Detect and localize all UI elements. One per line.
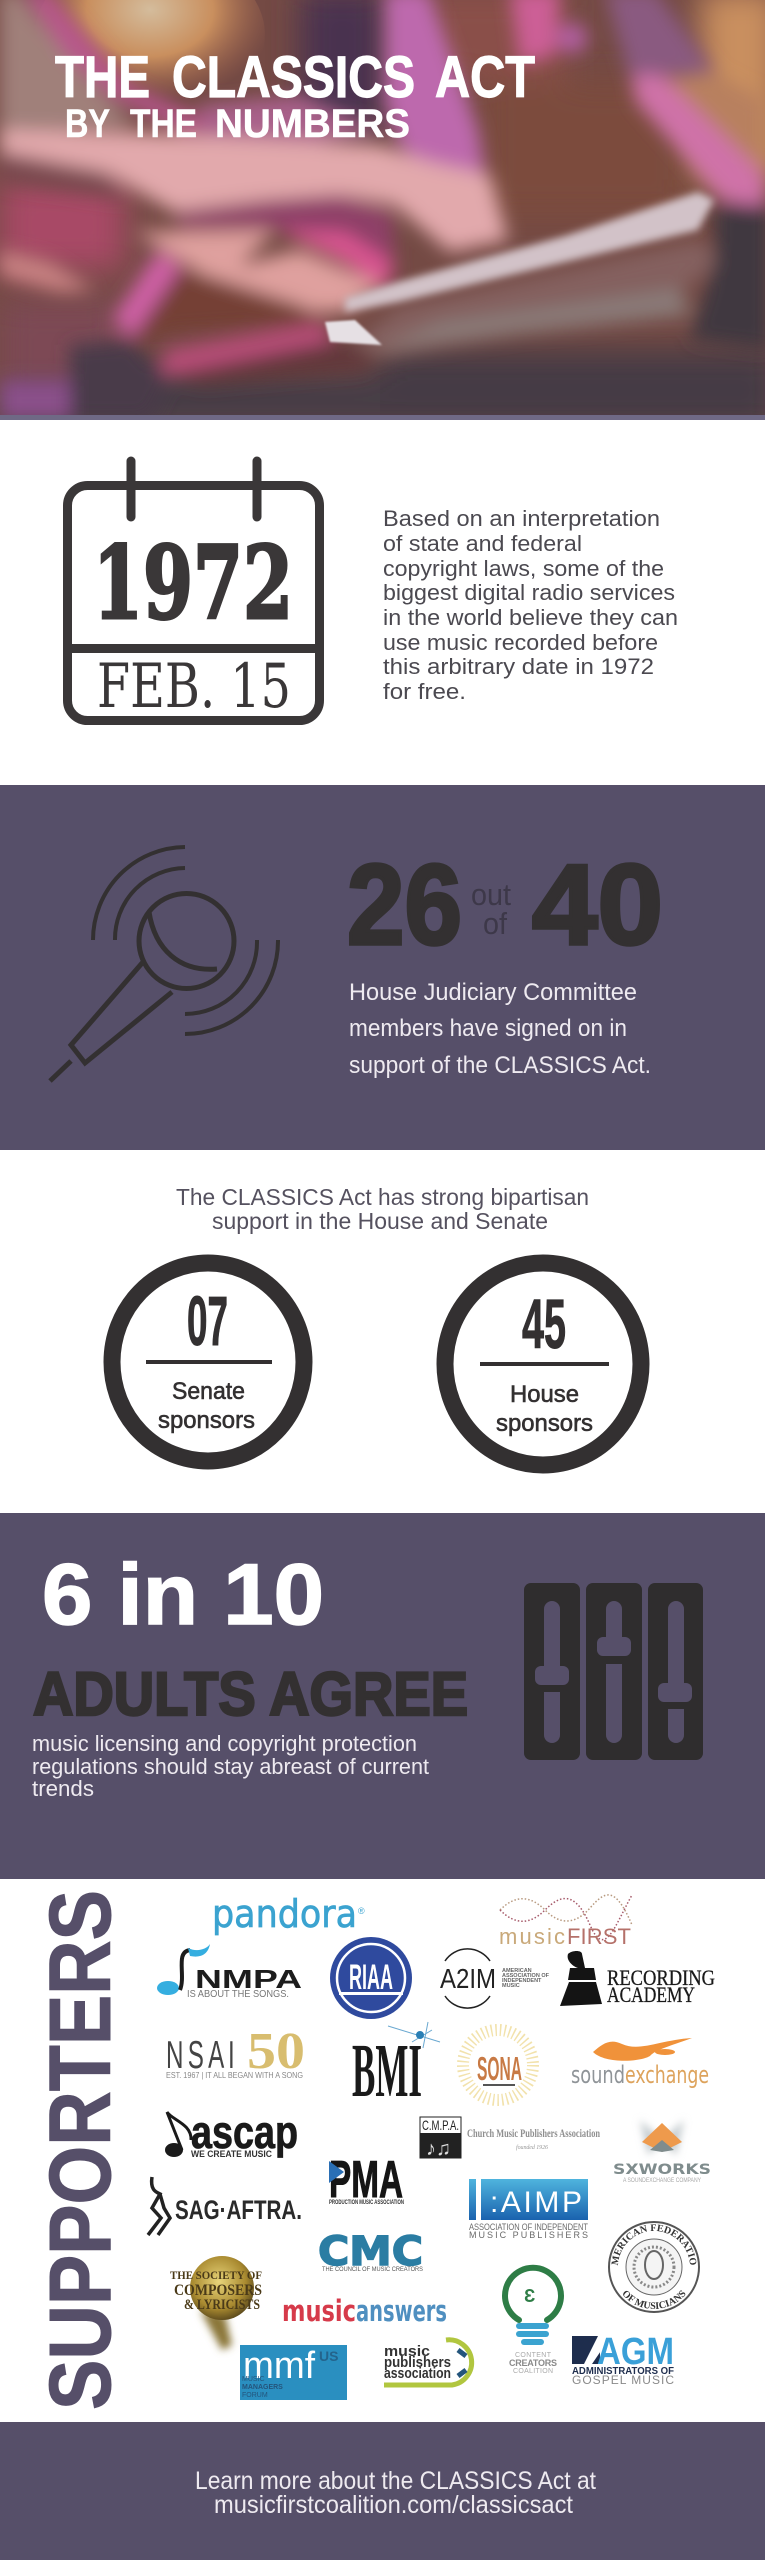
stat circle: senate sponsors: 07 [187,1282,228,1360]
text: committee members: members have signed on in [349,1015,627,1042]
logo: A2IM: A2IM [440,1963,496,1994]
logo: SXWORKS: A SOUNDEXCHANGE COMPANY [623,2178,701,2184]
logo: CMPA: founded 1926 [516,2144,548,2151]
logo: AIMP: MUSIC PUBLISHERS [469,2230,588,2240]
stat circle: house sponsors: 45 [522,1285,566,1363]
text: copyright explanation: of state and federal [383,531,582,556]
logo: Society of Composers and Lyricists [170,2256,262,2350]
logo: Music Managers Forum [240,2345,347,2400]
logo: Society of Composers and Lyricists: & LYRICISTS [184,2297,260,2313]
hero banner [0,0,765,430]
logo: Society of Composers and Lyricists: THE SOCIETY OF [170,2268,262,2282]
title [55,45,535,110]
logo: Music Managers Forum: FORUM [242,2392,268,2399]
logo: PMA [329,2151,404,2209]
text: copyright explanation: in the world believe they can [383,605,678,630]
text: learn more [195,2467,596,2519]
logo: pandora: ® [358,1906,365,1916]
logo: SONA [463,2030,533,2100]
icon: microphone [50,847,278,1081]
panel: bipartisan sponsors [0,1150,765,1513]
logo: A2IM: INDEPENDENT [502,1978,542,1984]
icon: mixer sliders [524,1583,703,1760]
text: learn more: Learn more about the CLASSICS Act at [195,2467,596,2495]
text: copyright explanation [383,506,678,704]
logo: Music Publishers Association: association [384,2365,451,2382]
logo: musicFIRST [499,1895,632,1949]
logo: CMPA: ♪♫ [426,2138,451,2160]
logo: Recording Academy: ACADEMY [607,1982,695,2007]
logo: musicFIRST: FIRST [567,1924,631,1949]
logo: AGM: ADMINISTRATORS OF [572,2366,674,2377]
text: copyright explanation: for free. [383,679,466,704]
logo: Society of Composers and Lyricists: COMPOSERS [174,2282,262,2299]
text: bipartisan heading [176,1184,589,1234]
logo: music answers: answers [356,2294,447,2328]
logo: NSAI 50: NSAI [166,2033,235,2076]
subtitle [65,102,410,146]
logo: AIMP: ASSOCIATION OF INDEPENDENT [469,2222,588,2232]
logo: Music Managers Forum: MANAGERS [242,2384,283,2391]
stat circle: house sponsors [445,1263,641,1465]
text: learn more: musicfirstcoalition.com/classicsact [214,2491,573,2519]
subtitle: NUMBERS [215,102,410,146]
logo: BMI [352,2022,440,2113]
warm glow [50,0,264,94]
stat circle: house sponsors: sponsors [496,1410,593,1437]
logo: NSAI 50: 50 [247,2023,305,2080]
text: copyright explanation: this arbitrary date in 1972 [383,654,654,679]
logo: CMC: THE COUNCIL OF MUSIC CREATORS [322,2267,423,2273]
logo: A2IM: ASSOCIATION OF [502,1973,550,1979]
logo: music answers: music [282,2294,356,2328]
logo: A2IM [440,1949,550,2008]
text: regulations: trends [32,1776,94,1801]
title: CLASSICS [172,45,415,110]
logo: A2IM: MUSIC [502,1983,520,1989]
stat: 26: 26 [347,842,462,969]
title: THE [55,45,150,110]
logo: A2IM: AMERICAN [502,1968,532,1974]
hero bottom strip [0,415,765,420]
stat: 6 in 10: 6 in 10 [42,1547,324,1643]
text: bipartisan heading: support in the House and Senate [212,1208,548,1234]
text: of: of [483,906,507,941]
logo: RIAA [330,1937,412,2019]
logo: PMA: PRODUCTION MUSIC ASSOCIATION [329,2200,404,2206]
logo: Content Creators Coalition: COALITION [513,2368,553,2375]
panel: footer [0,2422,765,2560]
subtitle: BY [65,102,110,146]
logo: Music Managers Forum: US [319,2348,338,2364]
logo: musicFIRST: music [499,1924,565,1949]
logo: SAG-AFTRA [148,2177,302,2235]
logo: CMPA [420,2117,600,2160]
logo: CMPA: C.M.P.A. [422,2117,459,2133]
icon: calendar: 1972 [93,524,293,642]
logo: Music Managers Forum: MUSIC [242,2376,265,2383]
logo: SXWORKS: SXWORKS [613,2162,711,2178]
logo: AGM [572,2331,674,2387]
stat circle: senate sponsors [112,1263,304,1461]
logo: NSAI 50: EST. 1967 | IT ALL BEGAN WITH A SONG [166,2071,303,2080]
subtitle: THE [130,102,197,146]
logo: SoundExchange [571,2038,709,2089]
heading: supporters (vertical): SUPPORTERS [32,1890,129,2410]
logo: SAG-AFTRA: SAG·AFTRA. [175,2195,302,2225]
logo: Content Creators Coalition [505,2268,561,2375]
logo: AGM: AGM [597,2331,674,2373]
logo: NMPA: IS ABOUT THE SONGS. [187,1989,289,2000]
logo: Content Creators Coalition: CONTENT [515,2352,552,2359]
logo: ASCAP: WE CREATE MUSIC [191,2149,272,2159]
logo: American Federation of Musicians: OF MUSICIANS [623,2290,686,2309]
text: regulations [32,1731,429,1801]
logo: pandora: pandora [212,1892,357,1936]
stat circle: house sponsors: House [510,1381,579,1408]
icon: calendar: FEB. 15 [97,651,291,722]
text: copyright explanation: use music recorded before [383,630,658,655]
logo: Music Publishers Association: publishers [384,2354,451,2371]
text: copyright explanation: biggest digital radio services [383,580,675,605]
logo: SoundExchange: exchange [625,2061,709,2089]
logo: BMI: BMI [352,2029,422,2113]
logo: ASCAP [165,2106,298,2159]
text: bipartisan heading: The CLASSICS Act has strong bipartisan [176,1184,589,1210]
stat circle: senate sponsors: Senate [172,1378,245,1405]
icon: calendar [67,461,320,722]
logo: Content Creators Coalition: CREATORS [509,2358,557,2368]
text: copyright explanation: copyright laws, some of the [383,556,664,581]
text: out: out [471,877,511,912]
logo: AIMP [469,2179,588,2240]
panel: 6 in 10 adults agree [0,1513,765,1879]
logo: CMPA: Church Music Publishers Association [467,2126,600,2140]
logo: Recording Academy: RECORDING [607,1965,715,1990]
logo: NMPA: NMPA [195,1964,302,1994]
title: ACT [435,45,535,110]
logo: American Federation of Musicians: AMERICAN FEDERATION [611,2224,696,2266]
logo: SoundExchange: sound [571,2061,625,2089]
logo: PMA: PMA [329,2151,403,2209]
logo: Content Creators Coalition: Ɛ [524,2286,535,2306]
text: committee members [349,979,651,1079]
heading: adults agree: ADULTS AGREE [33,1660,468,1728]
logo: Music Publishers Association [384,2340,472,2385]
text: committee members: House Judiciary Committee [349,979,637,1006]
logo: CMC: CMC [318,2229,423,2275]
logo: NSAI 50 [166,2023,305,2080]
logo: Music Managers Forum: mmf [243,2345,315,2387]
logo: AIMP: :AIMP [490,2186,582,2219]
front white key [325,320,382,345]
stat: 40: 40 [532,842,663,969]
text: committee members: support of the CLASSICS Act. [349,1052,651,1079]
logo: SXWORKS [613,2120,711,2184]
logo: SONA: SONA [477,2050,522,2087]
stat circle: senate sponsors: sponsors [158,1407,255,1434]
text: regulations: regulations should stay abreast of current [32,1754,429,1779]
text: regulations: music licensing and copyright protection [32,1731,417,1756]
logo: NMPA [157,1944,302,2000]
logo: RIAA: RIAA [349,1958,393,1997]
text: copyright explanation: Based on an interpretation [383,506,660,531]
panel: 26 out of 40 [0,785,765,1150]
logo: music answers [282,2294,447,2328]
logo: Recording Academy [560,1951,715,2007]
panel: 1972 date [0,420,765,785]
logo: ASCAP: ascap [191,2106,298,2158]
logo: AGM: GOSPEL MUSIC [572,2373,674,2387]
logo: Music Publishers Association: music [384,2343,430,2360]
hero photo: hands on piano [0,0,765,430]
